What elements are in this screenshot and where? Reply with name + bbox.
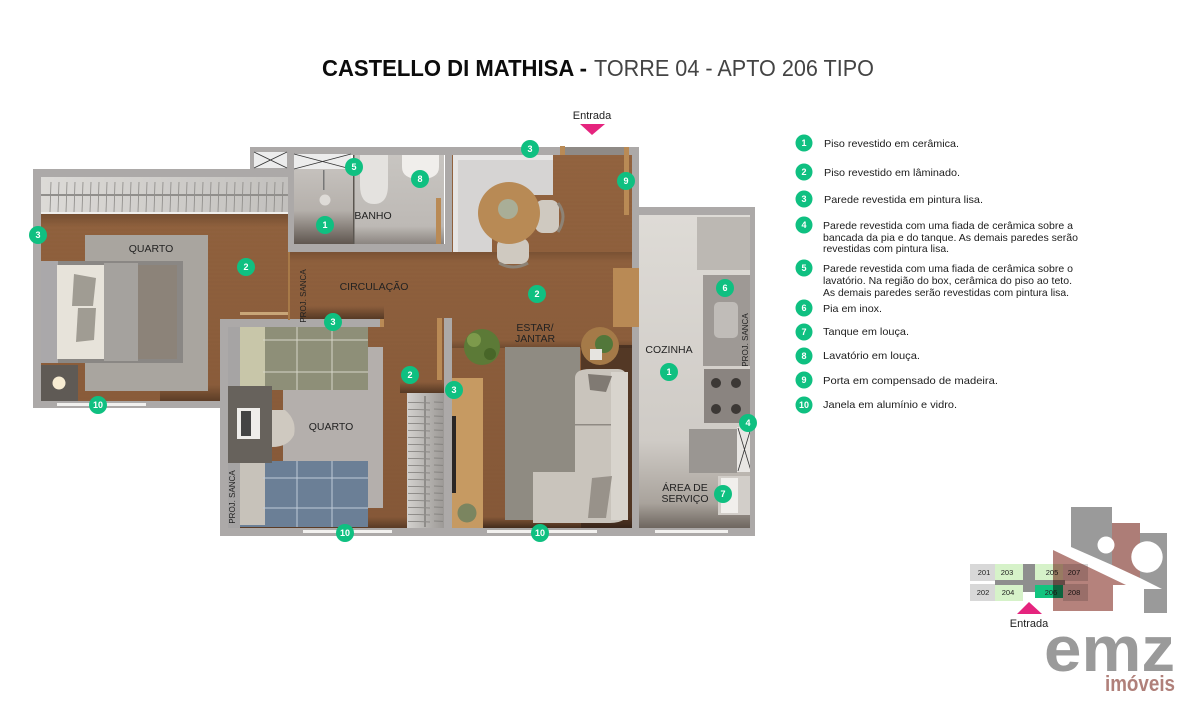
- key plan: Entrada: [1010, 618, 1049, 630]
- legend: Pia em inox.: [823, 303, 882, 315]
- legend: Parede revestida em pintura lisa.: [824, 194, 983, 206]
- legend: Piso revestido em cerâmica.: [824, 138, 959, 150]
- fridge: [697, 217, 750, 270]
- legend: Tanque em louça.: [823, 326, 909, 338]
- plan markers: 3: [451, 385, 457, 395]
- legend: Janela em alumínio e vidro.: [823, 399, 957, 411]
- stove: [704, 369, 750, 423]
- legend: As demais paredes serão revestidas com pintura lisa.: [823, 287, 1069, 299]
- room labels: [129, 210, 750, 524]
- room labels: CIRCULAÇÃO: [340, 280, 408, 293]
- doors: [240, 146, 629, 380]
- key plan: 205: [1046, 568, 1058, 577]
- legend: Parede revestida com uma fiada de cerâmica sobre a: [823, 220, 1073, 232]
- living room rug: [505, 347, 580, 520]
- room labels: SERVIÇO: [661, 493, 709, 505]
- legend: 10: [799, 400, 809, 410]
- legend: revestidas com pintura lisa.: [823, 243, 949, 255]
- single bed blue: [240, 461, 368, 527]
- room labels: PROJ. SANCA: [741, 313, 750, 367]
- logo mark: [1053, 507, 1167, 613]
- walnut cabinet: [613, 268, 639, 327]
- side table with plant: [581, 327, 619, 365]
- panel: kitchen: [639, 215, 752, 528]
- dining table: [478, 182, 540, 244]
- room labels: PROJ. SANCA: [299, 269, 308, 323]
- legend: 5: [801, 263, 807, 273]
- tv panel: [452, 378, 483, 528]
- logo wordmark: emz: [1044, 613, 1175, 685]
- counter with sink: [703, 275, 751, 366]
- room labels: QUARTO: [129, 243, 173, 255]
- shower head: [320, 170, 330, 206]
- plan markers: 4: [745, 418, 751, 428]
- plan markers: 10: [535, 528, 545, 538]
- tank: [718, 476, 752, 515]
- walls: [33, 147, 755, 536]
- plan markers: 2: [243, 262, 249, 272]
- key plan: 207: [1068, 568, 1080, 577]
- bathroom door: [436, 198, 441, 250]
- legend: lavatório. Na região do box, cerâmica do piso ao teto.: [823, 275, 1072, 287]
- wood floor: [41, 155, 639, 528]
- dining bench: [453, 155, 553, 252]
- plan markers: [29, 140, 757, 542]
- key plan: 208: [1068, 588, 1080, 597]
- plan markers: 1: [666, 367, 672, 377]
- room labels: COZINHA: [645, 344, 693, 356]
- floor plant: [464, 329, 500, 365]
- entrance marker: [573, 110, 612, 135]
- logo subtitle: imóveis: [1105, 671, 1175, 696]
- desk chair: [272, 410, 295, 447]
- shaft: [737, 427, 752, 472]
- panel: bedroom 1 closet: [41, 177, 288, 214]
- plan markers: 5: [351, 162, 357, 172]
- key plan: 204: [1002, 588, 1014, 597]
- legend: Parede revestida com uma fiada de cerâmica sobre o: [823, 263, 1073, 275]
- legend: Piso revestido em lâminado.: [824, 167, 960, 179]
- plan markers: 2: [534, 289, 540, 299]
- plan markers: 10: [93, 400, 103, 410]
- legend: 7: [801, 327, 807, 337]
- key plan: 203: [1001, 568, 1013, 577]
- nightstand with lamp: [41, 365, 78, 401]
- key plan: 206: [1045, 588, 1057, 597]
- entrance marker: Entrada: [573, 110, 612, 122]
- basin: [402, 155, 439, 179]
- double bed: [41, 261, 183, 363]
- room labels: ÁREA DE: [662, 481, 708, 494]
- room labels: BANHO: [354, 210, 392, 222]
- room labels: JANTAR: [515, 333, 555, 345]
- plan markers: 7: [720, 489, 726, 499]
- key plan: 201: [978, 568, 990, 577]
- legend: [796, 134, 1078, 414]
- headboard strip: [227, 327, 240, 528]
- toilet: [360, 155, 388, 204]
- dining chairs: [497, 200, 563, 267]
- desk with laptop: [227, 386, 272, 463]
- legend: Lavatório em louça.: [823, 350, 920, 362]
- single bed sage: [240, 327, 368, 390]
- floor plan: [29, 140, 757, 542]
- legend: Porta em compensado de madeira.: [823, 375, 998, 387]
- plan markers: 8: [417, 174, 423, 184]
- plan markers: 10: [340, 528, 350, 538]
- plan markers: 9: [623, 176, 629, 186]
- plan markers: 2: [407, 370, 413, 380]
- title: CASTELLO DI MATHISA -: [322, 55, 587, 81]
- key plan: 202: [977, 588, 989, 597]
- windows: [57, 403, 728, 533]
- rug bedroom 1: [85, 235, 208, 391]
- legend: 9: [801, 375, 807, 385]
- logo: emz imóveis: [1044, 507, 1175, 696]
- plan markers: 3: [35, 230, 41, 240]
- room labels: QUARTO: [309, 421, 353, 433]
- plan markers: 3: [330, 317, 336, 327]
- legend: 1: [801, 138, 807, 148]
- closet bedroom 2: [407, 393, 444, 528]
- legend: bancada da pia e do tanque. As demais paredes serão: [823, 232, 1078, 244]
- legend: 3: [801, 194, 807, 204]
- plan markers: 1: [322, 220, 328, 230]
- key plan: [970, 564, 1088, 630]
- legend: 2: [801, 167, 807, 177]
- title: [322, 55, 874, 81]
- sofa: [533, 369, 628, 523]
- legend: 4: [801, 220, 807, 230]
- washer: [689, 429, 737, 473]
- legend: 8: [801, 351, 807, 361]
- legend: 6: [801, 303, 807, 313]
- void shafts: [254, 152, 351, 169]
- room labels: ESTAR/: [516, 322, 554, 334]
- rug bedroom 2: [283, 347, 383, 508]
- plan markers: 3: [527, 144, 533, 154]
- panel: bathroom: [294, 155, 444, 250]
- room labels: PROJ. SANCA: [228, 470, 237, 524]
- title: TORRE 04 - APTO 206 TIPO: [594, 55, 874, 81]
- plan markers: 6: [722, 283, 728, 293]
